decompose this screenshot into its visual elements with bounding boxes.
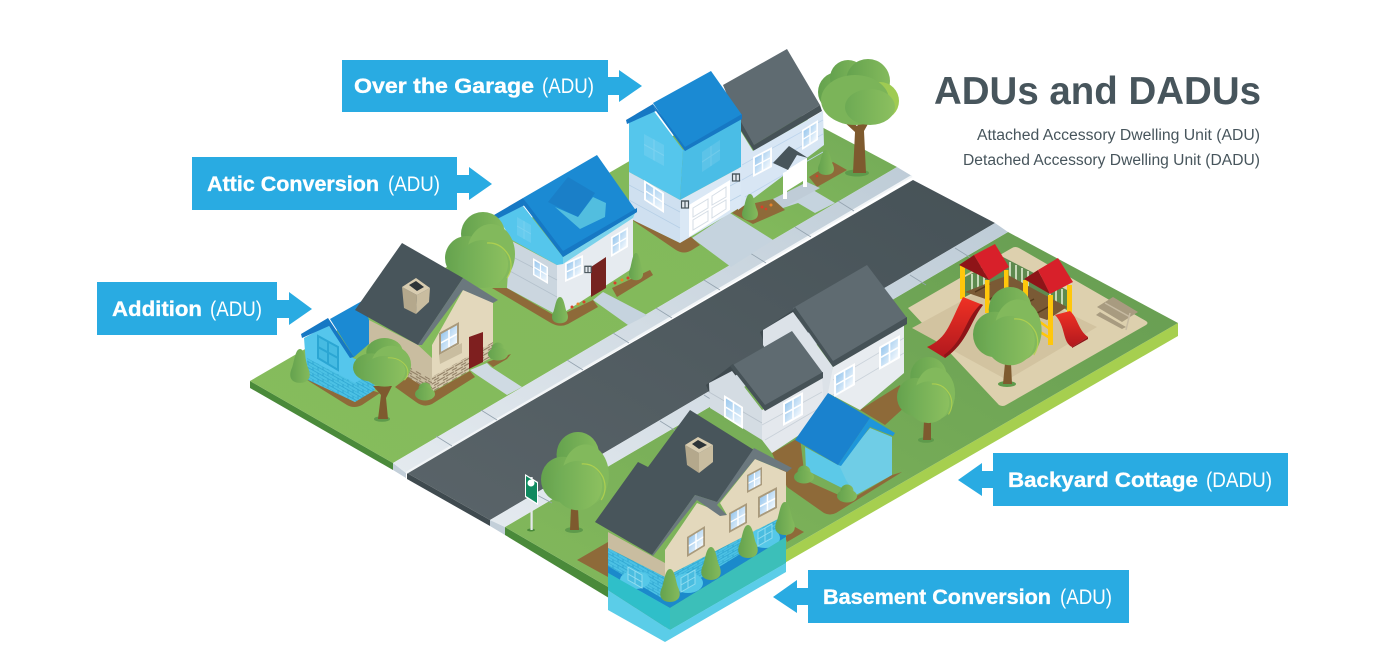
callout: addition [97, 282, 312, 335]
roof overhang [652, 448, 792, 556]
house: backyard main house [706, 265, 907, 514]
lower storey [629, 172, 680, 243]
upper lot: grass [250, 90, 897, 470]
deck [965, 275, 1067, 320]
eave shadows on road [760, 310, 800, 340]
garage door [689, 180, 730, 237]
callout: over the garage [342, 60, 642, 112]
title: ADUs and DADUs [934, 70, 1261, 113]
driveway and walk [692, 213, 773, 267]
cottage roof [795, 393, 870, 465]
roof eave [738, 105, 822, 151]
small roof [733, 331, 823, 407]
callout: basement conversion: Basement Conversion [823, 585, 1051, 609]
path and beds [593, 292, 647, 325]
shrubs [660, 569, 680, 602]
window [802, 120, 818, 150]
translucent lower block [608, 563, 786, 642]
chimney [685, 437, 713, 473]
house: basement conversion (ADU) [577, 410, 804, 642]
shrubs [290, 349, 310, 383]
basement brick left [608, 548, 665, 607]
callout: addition: (ADU) [210, 298, 262, 321]
left slide [927, 297, 983, 358]
blue upper storey [629, 110, 683, 200]
walls [369, 320, 432, 392]
tree: beside attic house [445, 212, 515, 288]
left wall [608, 532, 665, 577]
connector wall [763, 312, 833, 410]
dirt beds [629, 162, 847, 252]
road [407, 180, 995, 526]
windows [724, 395, 743, 429]
door [469, 332, 483, 369]
lower lot: grass [505, 232, 1178, 632]
window [644, 180, 664, 213]
upper sidewalk [393, 167, 912, 478]
small house right wall [762, 377, 825, 453]
lanterns [681, 201, 689, 208]
chimney [402, 278, 430, 314]
back railing [1003, 257, 1067, 310]
ladder [1040, 322, 1050, 338]
cottage walls [805, 447, 856, 495]
dormer [548, 177, 606, 229]
tree: backyard [897, 357, 955, 443]
stone base [408, 366, 432, 392]
callout: basement conversion: (ADU) [1060, 586, 1112, 609]
roof overhang [418, 278, 498, 345]
gray roof rear section [723, 49, 820, 145]
path [470, 363, 522, 395]
house: over the garage (ADU) [626, 49, 847, 267]
sand [908, 247, 1148, 406]
right slide [1055, 311, 1088, 348]
bench [1096, 297, 1138, 330]
basement brick front [665, 515, 786, 603]
tree: playground [973, 287, 1042, 387]
roof [355, 243, 463, 345]
flowers [760, 175, 818, 210]
roof [595, 410, 754, 555]
blue roof [653, 71, 742, 151]
small house left wall [709, 371, 762, 440]
window [439, 322, 459, 355]
large roof [793, 265, 907, 363]
tree: front of addition [353, 338, 411, 422]
upper windows [687, 526, 705, 557]
dirt [860, 385, 907, 425]
window box [439, 343, 462, 364]
blue roof [523, 155, 637, 257]
subtitle: attached: Attached Accessory Dwelling Unit (ADU) [977, 127, 1260, 144]
house: attic conversion (ADU) [492, 155, 653, 326]
callout: attic conversion: Attic Conversion [207, 172, 379, 196]
windows [565, 255, 583, 282]
blue addition [301, 301, 375, 402]
shrubs [794, 466, 814, 484]
playground [908, 244, 1148, 406]
callout: attic conversion [192, 157, 492, 210]
dirt beds [577, 542, 608, 577]
porch [773, 146, 820, 208]
door [591, 257, 606, 297]
callout: basement conversion [773, 570, 1129, 623]
window wells [620, 524, 780, 593]
red roofs [959, 244, 1073, 294]
street sign [525, 474, 538, 532]
house: backyard cottage (DADU) [794, 393, 895, 502]
callout: backyard cottage [958, 453, 1288, 506]
callout: backyard cottage: Backyard Cottage [1008, 468, 1198, 492]
subtitle: detached: Detached Accessory Dwelling Unit (DADU) [963, 152, 1260, 169]
callout: backyard cottage: (DADU) [1206, 469, 1272, 492]
dark floor [608, 526, 786, 608]
callout: addition: Addition [112, 297, 202, 321]
tree: near sign [541, 432, 609, 533]
shrubs [742, 194, 758, 220]
window [753, 147, 772, 177]
walls [507, 240, 557, 315]
blue gable [498, 206, 563, 265]
callout: attic conversion: (ADU) [388, 173, 440, 196]
large house wall [828, 325, 904, 410]
shrubs [552, 297, 568, 323]
yellow posts [960, 265, 1072, 345]
rear section wall [738, 111, 824, 210]
callout: over the garage: Over the Garage [354, 74, 534, 98]
flowers [570, 276, 630, 308]
dirt beds [307, 354, 511, 407]
house: addition (ADU) [290, 243, 522, 407]
teal slab [608, 537, 786, 630]
gable walls [665, 459, 786, 577]
tree: large top right [818, 59, 899, 176]
callout: over the garage: (ADU) [542, 75, 594, 98]
lower sidewalk [490, 223, 1008, 535]
